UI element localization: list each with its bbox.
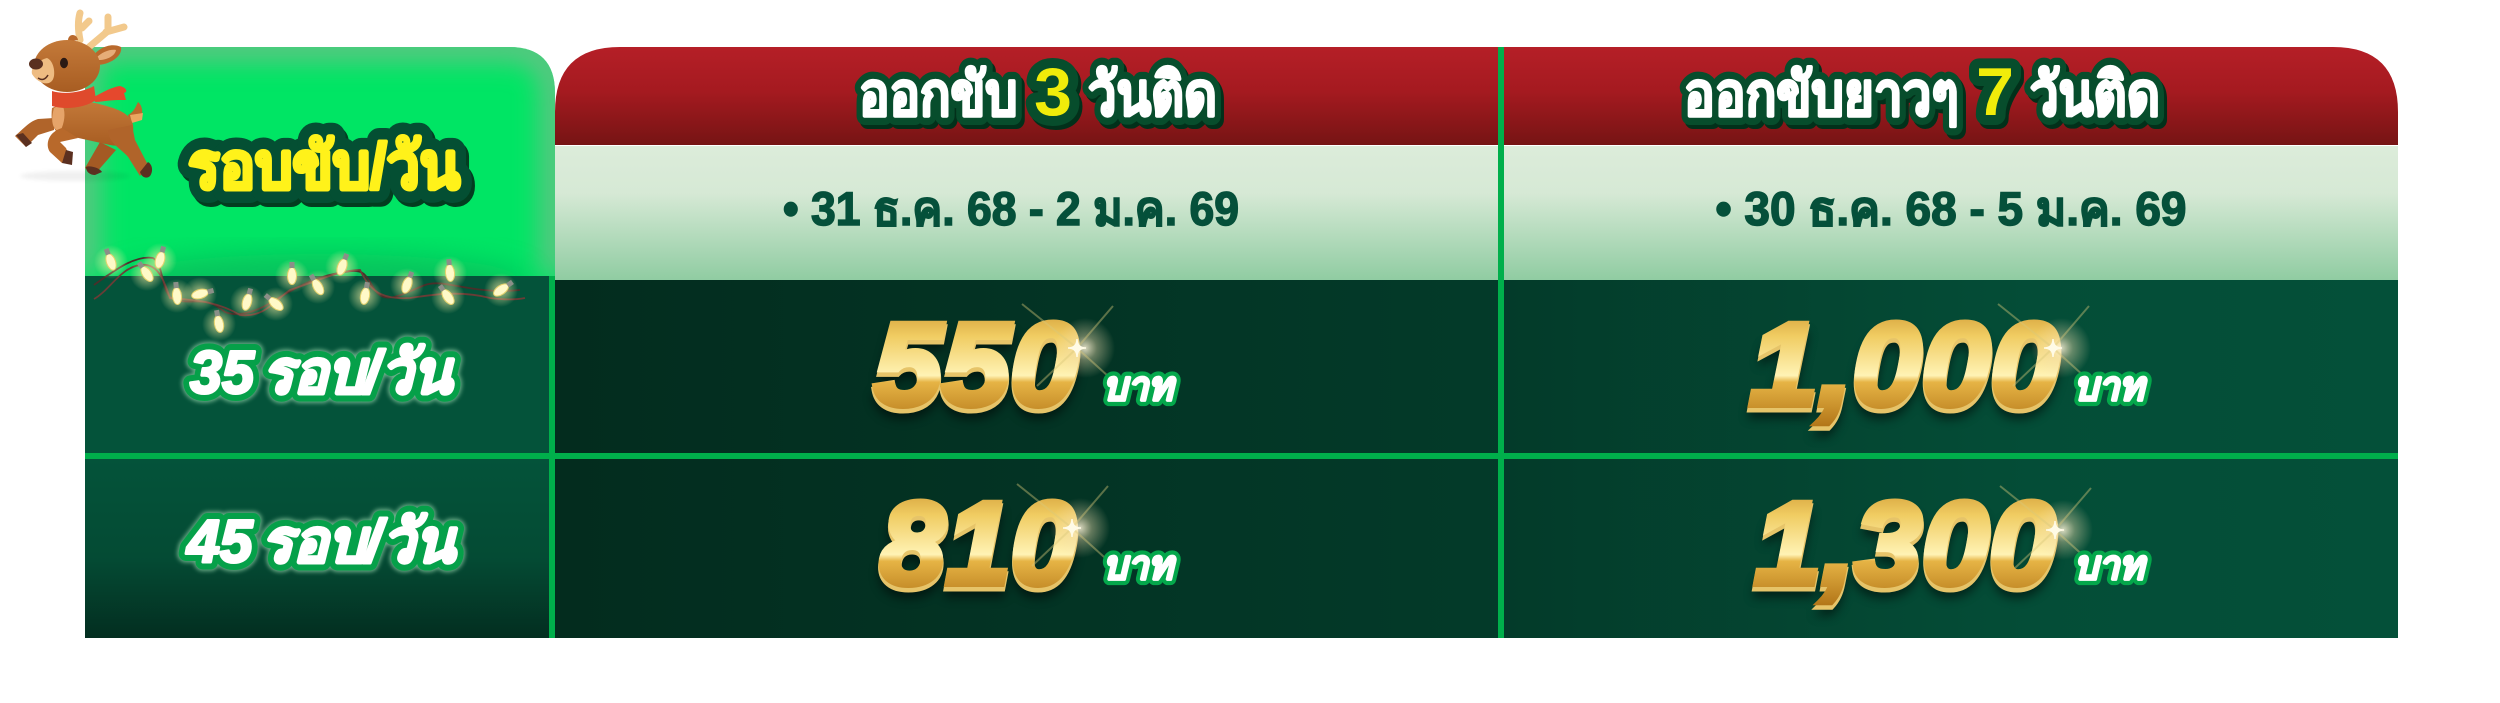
price: 1,300 baht: 1,300	[1754, 478, 2056, 610]
row label: 35 rounds per day: 35 รอบ/วัน	[190, 339, 455, 406]
price: 550 baht: 550	[874, 310, 1078, 442]
icon: reindeer	[15, 13, 152, 181]
text: baht unit: บาท	[1103, 544, 1176, 588]
text: baht unit: บาท	[1103, 365, 1176, 409]
heading: rounds per day: รอบขับ/วัน	[188, 130, 460, 202]
text: baht unit: บาท	[2074, 544, 2147, 588]
price: 550 baht: 550	[874, 303, 1078, 435]
heading: rounds per day: รอบขับ/วัน	[191, 134, 463, 206]
text: baht unit: บาท	[2074, 365, 2147, 409]
heading: 7 days in a row: 7	[1979, 58, 2017, 134]
price: 1,300 baht: 1,300	[1754, 482, 2056, 614]
icon: sparkle	[1022, 304, 1119, 386]
price: 810 baht: 810	[880, 478, 1076, 610]
row label: 35 rounds per day: 35 รอบ/วัน	[190, 339, 455, 406]
heading: 7 days in a row: ออกขับยาวๆ วันติด	[1684, 61, 2160, 128]
row label: 45 rounds per day: 45 รอบ/วัน	[186, 508, 458, 575]
panel: header cell rounds per day	[85, 47, 555, 276]
text: baht unit: บาท	[1103, 544, 1176, 588]
price: 550 baht	[874, 299, 1176, 442]
row label: 45 rounds per day: 45 รอบ/วัน	[186, 508, 458, 575]
row label: 35 rounds per day: 35 รอบ/วัน	[190, 339, 455, 406]
panel: column header 3 days	[555, 47, 1498, 145]
heading: 3 days in a row: ออกขับ วันติด	[859, 61, 1217, 128]
price: 1,000 baht: 1,000	[1749, 303, 2059, 435]
price: 810 baht: 810	[880, 482, 1076, 614]
text: date range 30 Dec to 5 Jan: • 30 ธ.ค. 68 - 5 ม.ค. 69	[1716, 182, 2186, 235]
price: 1,000 baht: 1,000	[1749, 310, 2059, 442]
text: baht unit: บาท	[1103, 365, 1176, 409]
heading: 7 days in a row: ออกขับยาวๆ วันติด	[1684, 61, 2160, 128]
heading: 7 days in a row: ออกขับยาวๆ วันติด	[1687, 65, 2163, 132]
heading: rounds per day: รอบขับ/วัน	[188, 130, 460, 202]
price: 1,000 baht: 1,000	[1749, 299, 2059, 431]
icon: string lights	[89, 239, 525, 344]
price: 1,300 baht: 1,300	[1754, 489, 2056, 621]
heading: 3 days in a row: 3	[1037, 58, 1075, 134]
icon: sparkle	[1998, 304, 2095, 386]
price: 810 baht: 810	[880, 489, 1076, 621]
text: baht unit: บาท	[2074, 544, 2147, 588]
text: baht unit: บาท	[2074, 365, 2147, 409]
price: 1,300 baht	[1754, 478, 2147, 621]
price: 1,000 baht	[1749, 299, 2147, 442]
heading: 7 days in a row: 7	[1976, 54, 2014, 130]
heading: 3 days in a row: ออกขับ วันติด	[859, 61, 1217, 128]
panel: date band 3 days	[555, 146, 1498, 280]
panel: column header 7 days	[1504, 47, 2398, 145]
price: 550 baht: 550	[874, 299, 1078, 431]
icon: sparkle	[2000, 486, 2097, 568]
panel: date band 7 days	[1504, 146, 2398, 280]
heading: 3 days in a row: ออกขับ วันติด	[862, 65, 1220, 132]
row label: 45 rounds per day: 45 รอบ/วัน	[186, 508, 458, 575]
text: date range 31 Dec to 2 Jan: • 31 ธ.ค. 68 - 2 ม.ค. 69	[783, 182, 1239, 235]
icon: sparkle	[1017, 484, 1114, 566]
heading: 3 days in a row: 3	[1034, 54, 1072, 130]
panel: price grid background	[85, 47, 2398, 638]
price: 810 baht	[880, 478, 1176, 621]
